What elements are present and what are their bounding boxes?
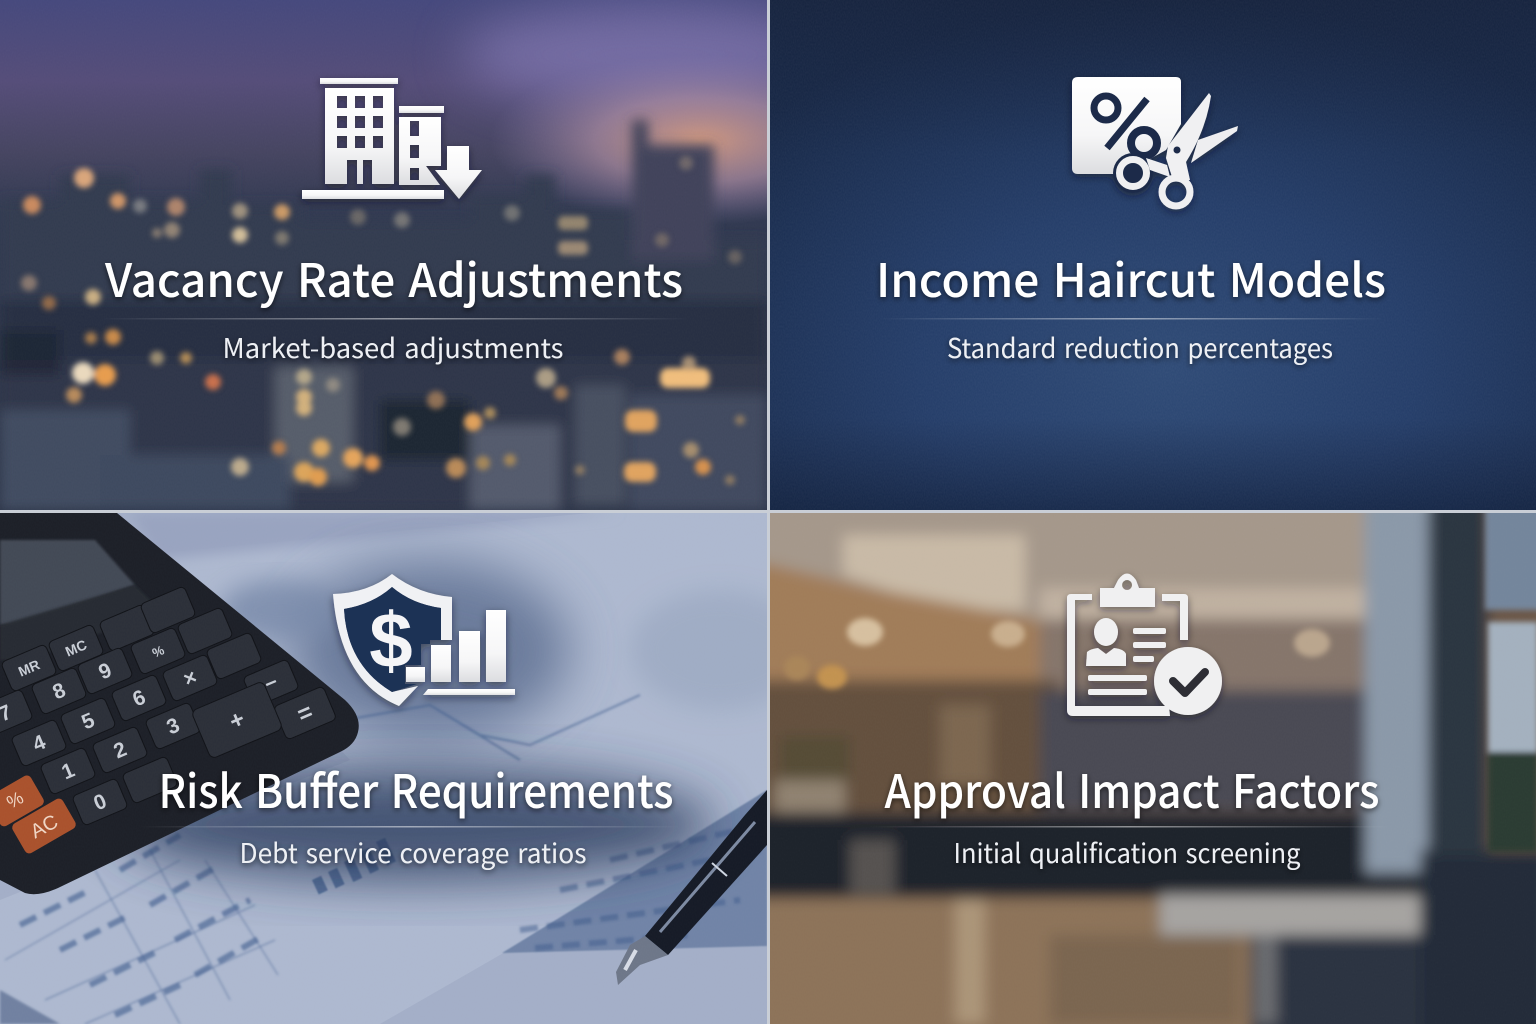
lower right printed sheet xyxy=(502,790,767,953)
calculator key labels xyxy=(0,636,317,815)
orange keys xyxy=(0,774,78,855)
calculator and papers background photo: AC xyxy=(27,811,62,843)
subtitle: Debt service coverage ratios xyxy=(240,832,586,871)
calculator key labels: + xyxy=(225,705,249,736)
panel: risk buffer requirements xyxy=(0,513,810,1024)
calculator key labels: 9 xyxy=(95,659,115,684)
calculator and papers background photo: % xyxy=(3,787,27,813)
title: Approval Impact Factors xyxy=(884,756,1380,822)
title: Income Haircut Models xyxy=(876,245,1386,311)
calculator key labels: 1 xyxy=(58,758,78,784)
calculator key labels: − xyxy=(261,670,281,696)
icon: shield with dollar and bars xyxy=(333,574,515,706)
calculator key labels: 2 xyxy=(110,738,130,763)
panel: income haircut models xyxy=(770,0,1536,510)
calculator key labels: % xyxy=(150,642,167,661)
panel: approval impact factors xyxy=(750,495,1536,1024)
calculator key labels: × xyxy=(180,665,200,691)
city background photo xyxy=(0,0,767,510)
calculator key labels: 6 xyxy=(129,686,149,711)
title: Vacancy Rate Adjustments xyxy=(104,245,683,311)
icon: shield with dollar and bars: $ xyxy=(369,596,413,684)
calculator key labels: 3 xyxy=(163,714,183,739)
pen xyxy=(616,790,767,985)
calculator key labels: MC xyxy=(63,636,89,660)
icon: clipboard with profile and check xyxy=(1067,574,1222,716)
panel: vacancy rate adjustments xyxy=(0,0,767,510)
printed table and chart xyxy=(5,695,760,1024)
calculator key labels: = xyxy=(293,698,317,729)
calculator key labels: 5 xyxy=(78,708,98,734)
title: Risk Buffer Requirements xyxy=(158,756,674,822)
subtitle: Initial qualification screening xyxy=(954,832,1300,871)
calculator and papers background photo xyxy=(0,513,810,1024)
calculator key labels: 4 xyxy=(29,730,49,756)
calculator key labels: MR xyxy=(16,656,42,680)
subtitle: Standard reduction percentages xyxy=(947,327,1333,366)
icon: building with down arrow xyxy=(302,78,482,199)
subtitle: Market-based adjustments xyxy=(222,327,564,366)
calculator xyxy=(0,513,359,894)
calculator key labels: 0 xyxy=(90,790,110,815)
blurred office background photo xyxy=(750,495,1536,1024)
navy textured background xyxy=(770,0,1536,510)
calculator key labels: 8 xyxy=(49,678,69,704)
icon: percent card with scissors xyxy=(1072,77,1238,206)
